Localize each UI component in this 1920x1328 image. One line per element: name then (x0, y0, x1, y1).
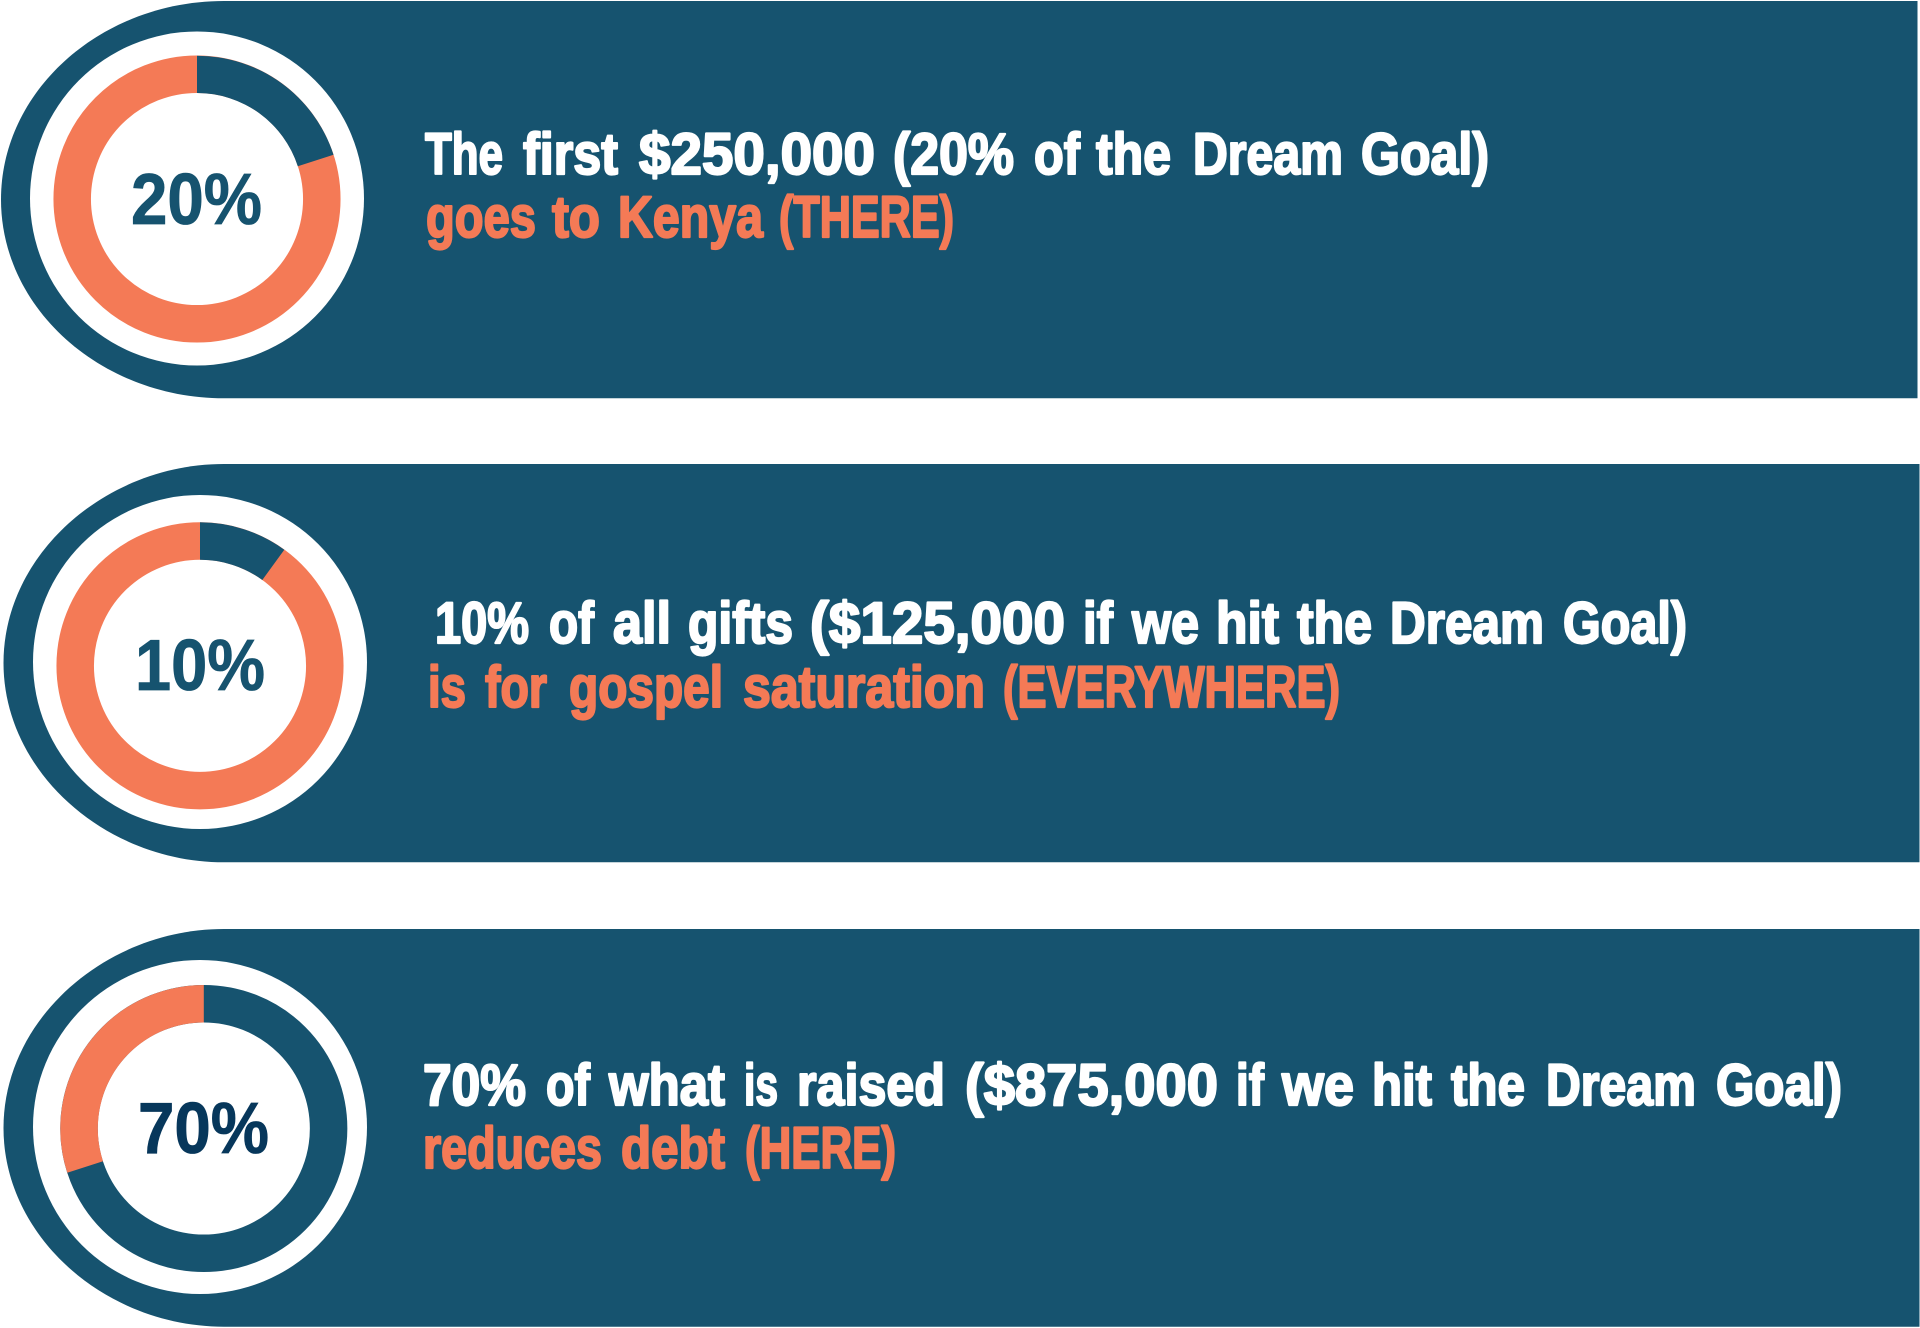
headline: The (425, 122, 503, 187)
percentage label: 20% (131, 160, 262, 240)
text block (423, 1053, 1842, 1181)
subline: gospel (569, 655, 723, 720)
subline: for (485, 655, 547, 720)
donut chart: 20% (72, 56, 333, 324)
headline: ($125,000 (810, 591, 1065, 656)
headline: 10% (435, 591, 529, 656)
panel: 70% debt (4, 929, 1920, 1327)
headline: raised (797, 1053, 945, 1118)
headline: is (744, 1053, 778, 1118)
subline: debt (621, 1116, 725, 1181)
white ring (30, 32, 364, 366)
headline: if (1236, 1053, 1265, 1118)
subline: (HERE) (745, 1116, 896, 1181)
subline: is (428, 655, 466, 720)
headline: the (1096, 122, 1171, 187)
headline: the (1297, 591, 1372, 656)
headline: the (1451, 1053, 1525, 1118)
subline: Kenya (618, 185, 764, 250)
headline: $250,000 (639, 122, 875, 187)
donut chart: 10% (75, 522, 325, 791)
subline: goes (426, 185, 536, 250)
headline: 70% (423, 1053, 526, 1118)
text block (425, 122, 1489, 250)
headline: Dream (1390, 591, 1544, 656)
subline: (THERE) (779, 185, 954, 250)
percentage label: 10% (135, 626, 265, 706)
subline: (EVERYWHERE) (1003, 655, 1340, 720)
headline: of (1034, 122, 1081, 187)
headline: of (546, 1053, 591, 1118)
subline: to (552, 185, 600, 250)
headline: Goal) (1716, 1053, 1842, 1118)
panel background (4, 929, 1920, 1327)
panel background (1, 1, 1918, 398)
donut chart: 70% (60, 985, 329, 1253)
headline: gifts (688, 591, 793, 656)
headline: Dream (1546, 1053, 1696, 1118)
headline: of (549, 591, 595, 656)
text block (428, 591, 1687, 720)
headline: hit (1372, 1053, 1432, 1118)
panel background (4, 464, 1920, 862)
headline: what (608, 1053, 725, 1118)
percentage label: 70% (138, 1089, 269, 1169)
headline: if (1083, 591, 1114, 656)
subline: saturation (743, 655, 985, 720)
headline: (20% (893, 122, 1014, 187)
headline: Dream (1193, 122, 1343, 187)
subline: reduces (423, 1116, 602, 1181)
headline: ($875,000 (965, 1053, 1218, 1118)
headline: Goal) (1563, 591, 1687, 656)
panel: 20% Kenya (1, 1, 1918, 398)
panel: 10% gospel saturation (4, 464, 1920, 862)
headline: Goal) (1361, 122, 1489, 187)
headline: first (523, 122, 618, 187)
white ring (33, 495, 367, 829)
headline: hit (1216, 591, 1279, 656)
headline: all (613, 591, 671, 656)
white ring (33, 960, 367, 1294)
headline: we (1281, 1053, 1354, 1118)
headline: we (1131, 591, 1199, 656)
